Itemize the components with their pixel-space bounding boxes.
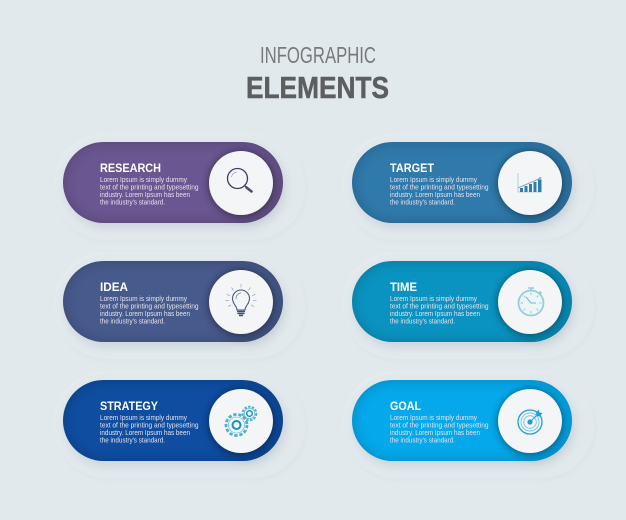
text block: strategy: the industry's standard. (100, 436, 165, 444)
text block: goal: industry. Lorem Ipsum has been (390, 429, 480, 437)
panel: idea (63, 261, 288, 349)
text block: strategy: text of the printing and typesetting (100, 422, 199, 430)
title (246, 42, 389, 105)
text block: time: industry. Lorem Ipsum has been (390, 310, 480, 318)
text block: strategy (100, 399, 199, 444)
text block: strategy: industry. Lorem Ipsum has been (100, 429, 190, 437)
text block: research: Lorem Ipsum is simply dummy (100, 176, 187, 184)
text block: time: Lorem Ipsum is simply dummy (390, 295, 477, 303)
icon: gears (209, 389, 273, 453)
icon: magnifying glass (209, 151, 273, 215)
text block: strategy: Lorem Ipsum is simply dummy (100, 414, 187, 422)
text block: target: the industry's standard. (390, 198, 455, 206)
text block: target (390, 161, 489, 206)
text block: research: text of the printing and typesetting (100, 184, 199, 192)
text block: strategy: STRATEGY (100, 399, 158, 413)
text block: idea: text of the printing and typesetting (100, 302, 199, 310)
text block: target: industry. Lorem Ipsum has been (390, 191, 480, 199)
icon: target (498, 389, 562, 453)
text block: research: the industry's standard. (100, 198, 165, 206)
text block: idea: industry. Lorem Ipsum has been (100, 310, 190, 318)
text block: research: industry. Lorem Ipsum has been (100, 191, 190, 199)
text block: target: Lorem Ipsum is simply dummy (390, 176, 477, 184)
text block: goal: Lorem Ipsum is simply dummy (390, 414, 477, 422)
panel: time (352, 261, 576, 349)
text block: target: text of the printing and typesetting (390, 184, 489, 192)
text block: research (100, 161, 199, 206)
panel: target (352, 142, 576, 230)
text block: idea (100, 280, 199, 326)
text block: research: RESEARCH (100, 161, 161, 175)
panel: research (63, 142, 288, 230)
icon: bar chart (498, 151, 562, 215)
text block: time (390, 280, 489, 326)
text block: time: the industry's standard. (390, 318, 455, 326)
text block: target: TARGET (390, 161, 435, 175)
text block: goal: text of the printing and typesetting (390, 422, 489, 430)
panel: strategy (63, 380, 288, 468)
text block: goal (390, 399, 489, 444)
icon: light bulb (209, 270, 273, 334)
text block: time: text of the printing and typesetting (390, 302, 489, 310)
text block: goal: the industry's standard. (390, 436, 455, 444)
text block: idea: Lorem Ipsum is simply dummy (100, 295, 187, 303)
panel: goal (352, 380, 576, 468)
text block: idea: the industry's standard. (100, 318, 165, 326)
text block: goal: GOAL (390, 399, 421, 413)
icon: stopwatch (498, 270, 562, 334)
text block: time: TIME (390, 280, 417, 294)
text block: idea: IDEA (100, 280, 128, 294)
